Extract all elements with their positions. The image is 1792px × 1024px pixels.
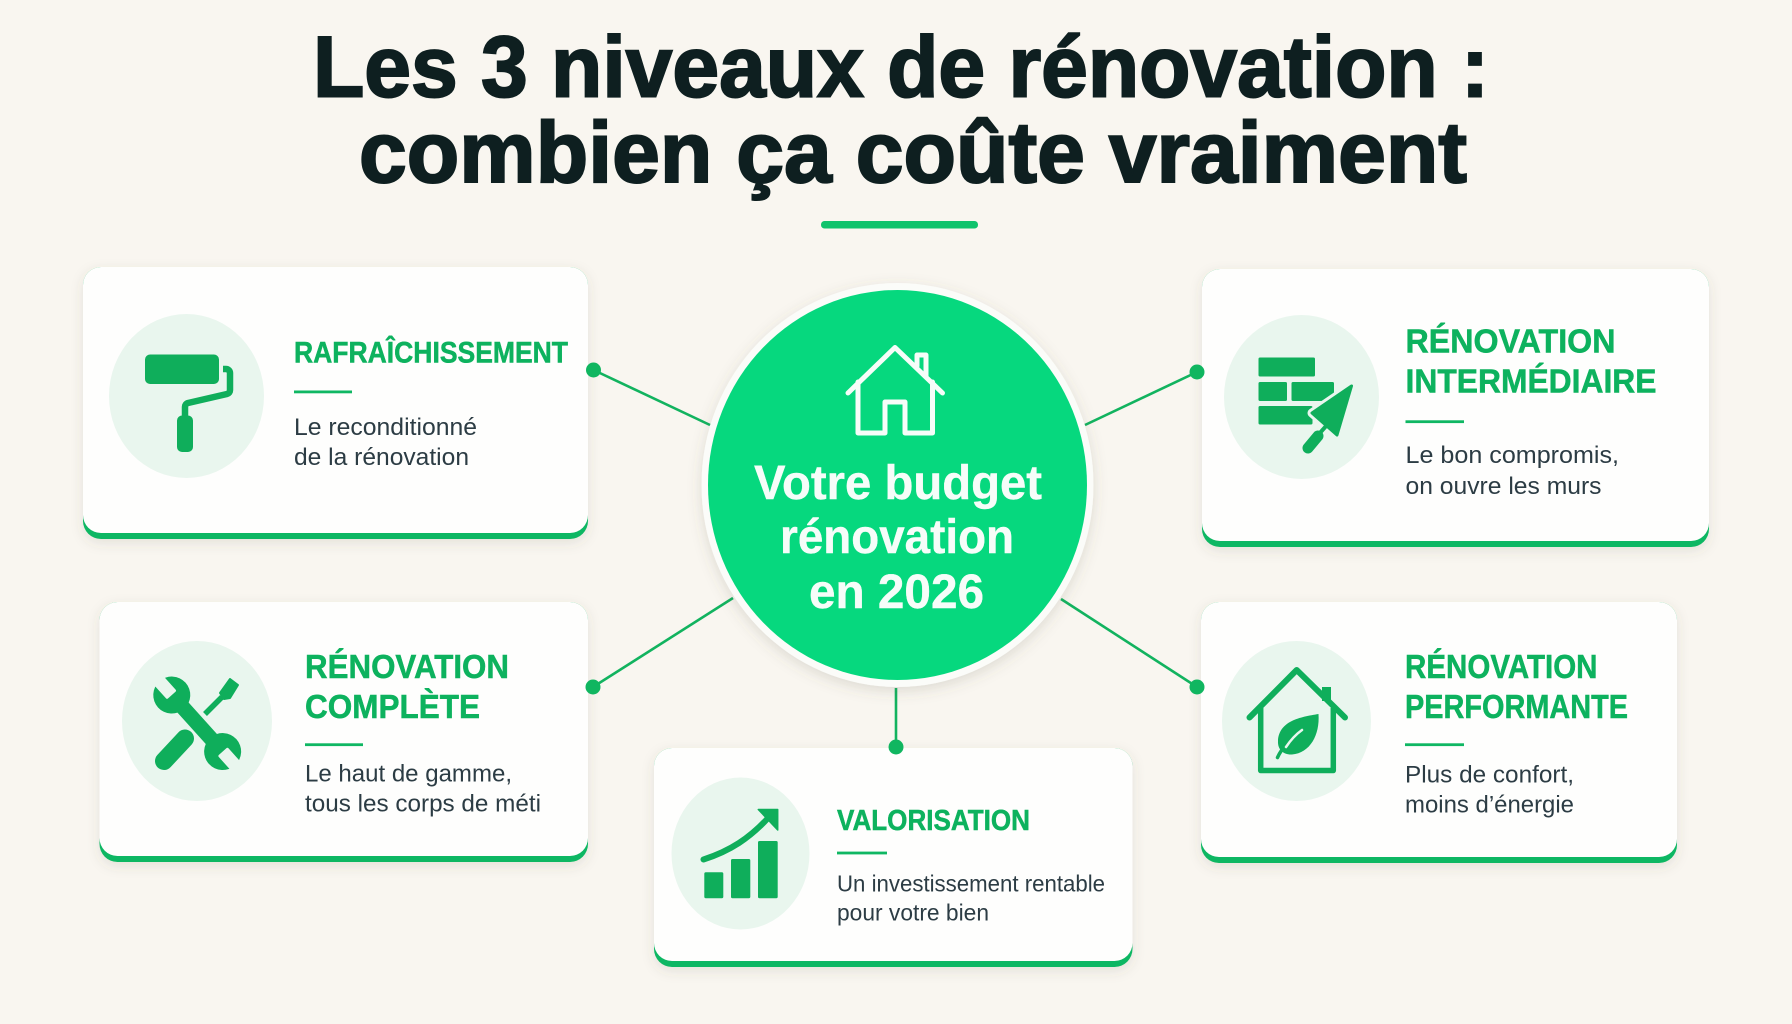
description: Le bon compromis, — [1406, 442, 1619, 469]
center heading: rénovation — [780, 511, 1014, 564]
icon: wrench and screwdriver — [122, 641, 272, 801]
description: pour votre bien — [837, 900, 989, 926]
title: combien ça coûte vraiment — [359, 105, 1467, 201]
heading: RÉNOVATION — [1405, 648, 1598, 686]
panel: rénovation complète — [100, 602, 588, 862]
divider — [305, 743, 363, 746]
description: de la rénovation — [294, 444, 469, 471]
card background — [1201, 602, 1677, 863]
heading: COMPLÈTE — [305, 688, 480, 726]
icon: paint roller — [109, 314, 264, 478]
card background — [83, 267, 588, 539]
panel: rénovation intermédiaire — [1202, 269, 1709, 547]
description: Plus de confort, — [1405, 762, 1574, 788]
divider — [1405, 743, 1464, 746]
panel: rafraîchissement — [83, 267, 588, 539]
center heading: Votre budget — [754, 457, 1042, 510]
title underline — [821, 221, 978, 228]
icon: house with leaf — [1222, 641, 1371, 801]
panel: valorisation — [654, 748, 1132, 967]
connector dots — [586, 362, 1204, 754]
divider — [1406, 420, 1464, 423]
icon: house — [848, 348, 942, 433]
heading: RAFRAÎCHISSEMENT — [294, 336, 568, 370]
divider — [837, 852, 887, 854]
heading: VALORISATION — [837, 805, 1030, 837]
description: Le haut de gamme, — [305, 760, 512, 788]
card background — [1202, 269, 1709, 547]
central circle — [702, 283, 1094, 687]
description: tous les corps de méti — [305, 790, 541, 818]
heading: RÉNOVATION — [305, 648, 509, 686]
divider — [294, 390, 352, 393]
title: Les 3 niveaux de rénovation : — [313, 20, 1489, 116]
heading: INTERMÉDIAIRE — [1406, 362, 1656, 400]
description: moins d’énergie — [1405, 792, 1574, 818]
card background — [100, 602, 588, 862]
description: on ouvre les murs — [1406, 473, 1602, 500]
icon: growth chart — [672, 778, 810, 930]
panel: rénovation performante — [1201, 602, 1677, 863]
heading: PERFORMANTE — [1405, 689, 1628, 726]
center heading: en 2026 — [809, 566, 984, 619]
description: Le reconditionné — [294, 414, 477, 441]
icon: bricks and trowel — [1224, 315, 1379, 479]
connector lines — [593, 370, 1197, 747]
description: Un investissement rentable — [837, 870, 1105, 896]
card background — [654, 748, 1132, 967]
title — [313, 20, 1489, 201]
heading: RÉNOVATION — [1406, 322, 1616, 360]
